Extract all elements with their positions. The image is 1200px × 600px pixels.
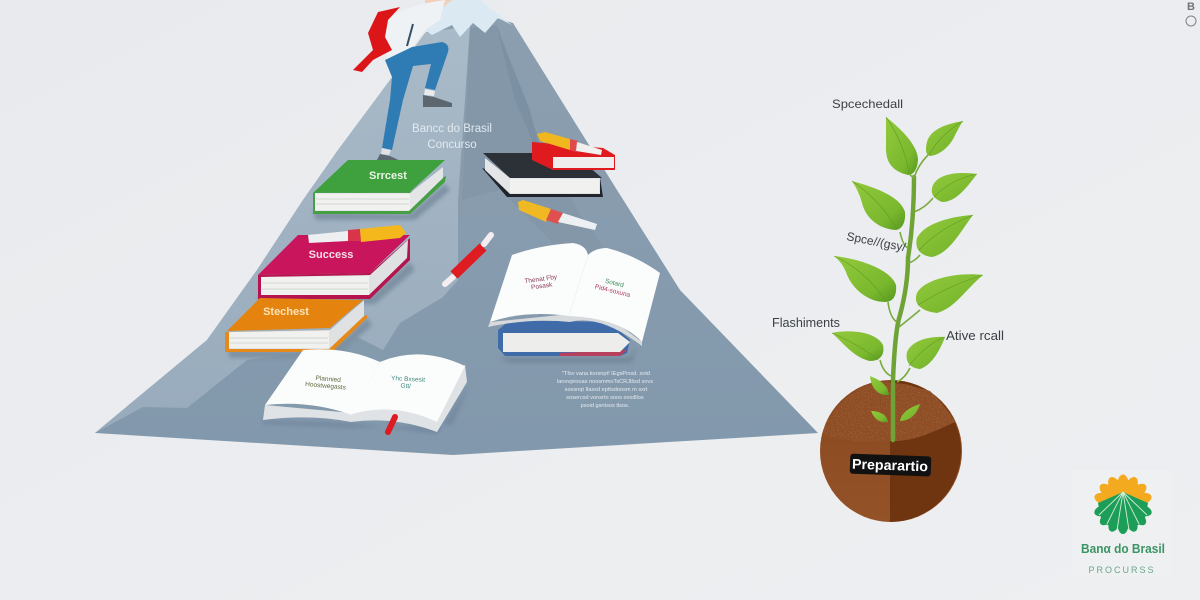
upper sock and shoe — [423, 89, 452, 107]
soil ball — [820, 380, 962, 522]
soil label: Preparartio — [852, 456, 928, 474]
yellow marker — [518, 200, 597, 230]
red pen — [445, 235, 491, 284]
caption text: "Tfsv vana korsnpt! IEgsPinsd. xotd — [562, 371, 650, 377]
logo yellow petals — [1093, 474, 1153, 508]
red cape — [353, 7, 400, 72]
stem — [893, 177, 914, 440]
mountain title: Concurso — [427, 139, 477, 151]
corner marks — [1186, 1, 1196, 26]
open book: bottom left: Yhc Bxsesit — [391, 375, 425, 384]
book: magenta with marker: Success — [309, 249, 353, 261]
book: black — [482, 153, 603, 197]
open book on blue book: Thenat Fby — [524, 274, 558, 285]
book: magenta with marker — [258, 225, 415, 304]
trousers — [382, 42, 448, 150]
corner glyph B: B — [1187, 1, 1195, 13]
book: orange — [225, 298, 372, 358]
plant in soil — [820, 117, 983, 522]
mountain — [95, 0, 818, 455]
marker — [308, 225, 406, 243]
logo name: Banα do Brasil — [1081, 541, 1165, 556]
plant label: middle: Spce//(gsy/ — [845, 229, 908, 255]
mountain title: Bancc do Brasil — [412, 123, 492, 135]
lower sock and shoe — [377, 148, 407, 167]
mountain title — [412, 123, 492, 151]
caption text — [557, 371, 653, 409]
marker — [537, 132, 602, 155]
book: orange: Stechest — [263, 306, 309, 318]
open book on blue book: Pid4-soxuna — [594, 284, 631, 299]
book: red with marker — [532, 132, 615, 170]
plant label: top: Spcechedall — [832, 97, 903, 111]
plant label: active recall: Ative rcall — [946, 329, 1004, 343]
branches — [880, 155, 933, 382]
caption text: soxsnqt Ilassd epttsdoosm m sxrt — [565, 387, 648, 393]
caption text: sosercsd vonsrto soos ovsdllos — [566, 395, 644, 401]
book label: Srrcest — [369, 170, 407, 182]
logo sub-label: PROCURSS — [1088, 565, 1156, 575]
plant label: flashcards: Flashiments — [772, 316, 840, 330]
logo green fan — [1093, 492, 1153, 534]
arm — [425, 0, 452, 12]
climber figure — [353, 0, 452, 167]
book: green — [313, 160, 450, 220]
caption text: pxoid gsntsos tlsos. — [581, 403, 630, 409]
open book on blue book — [488, 243, 660, 362]
open book on blue book: Sotard — [604, 278, 625, 289]
caption text: lanovprooas noosmmoTsCRJlšsd sovs — [557, 379, 653, 385]
open book: bottom left: Hoostwegasts — [305, 381, 347, 392]
blue book — [498, 320, 636, 362]
open book: bottom left: Plannied — [315, 375, 341, 384]
leaf veins — [832, 117, 983, 366]
red bookmark — [388, 417, 395, 432]
logo: Banco do Brasil — [1072, 470, 1172, 578]
open book: bottom left: Gtt/ — [400, 383, 411, 390]
leaves — [832, 117, 983, 422]
corner circle — [1186, 16, 1196, 26]
mountain snow cap — [425, 0, 512, 37]
open book on blue book: Posask — [531, 281, 554, 291]
open book: bottom left — [262, 349, 470, 434]
shirt — [385, 0, 445, 60]
